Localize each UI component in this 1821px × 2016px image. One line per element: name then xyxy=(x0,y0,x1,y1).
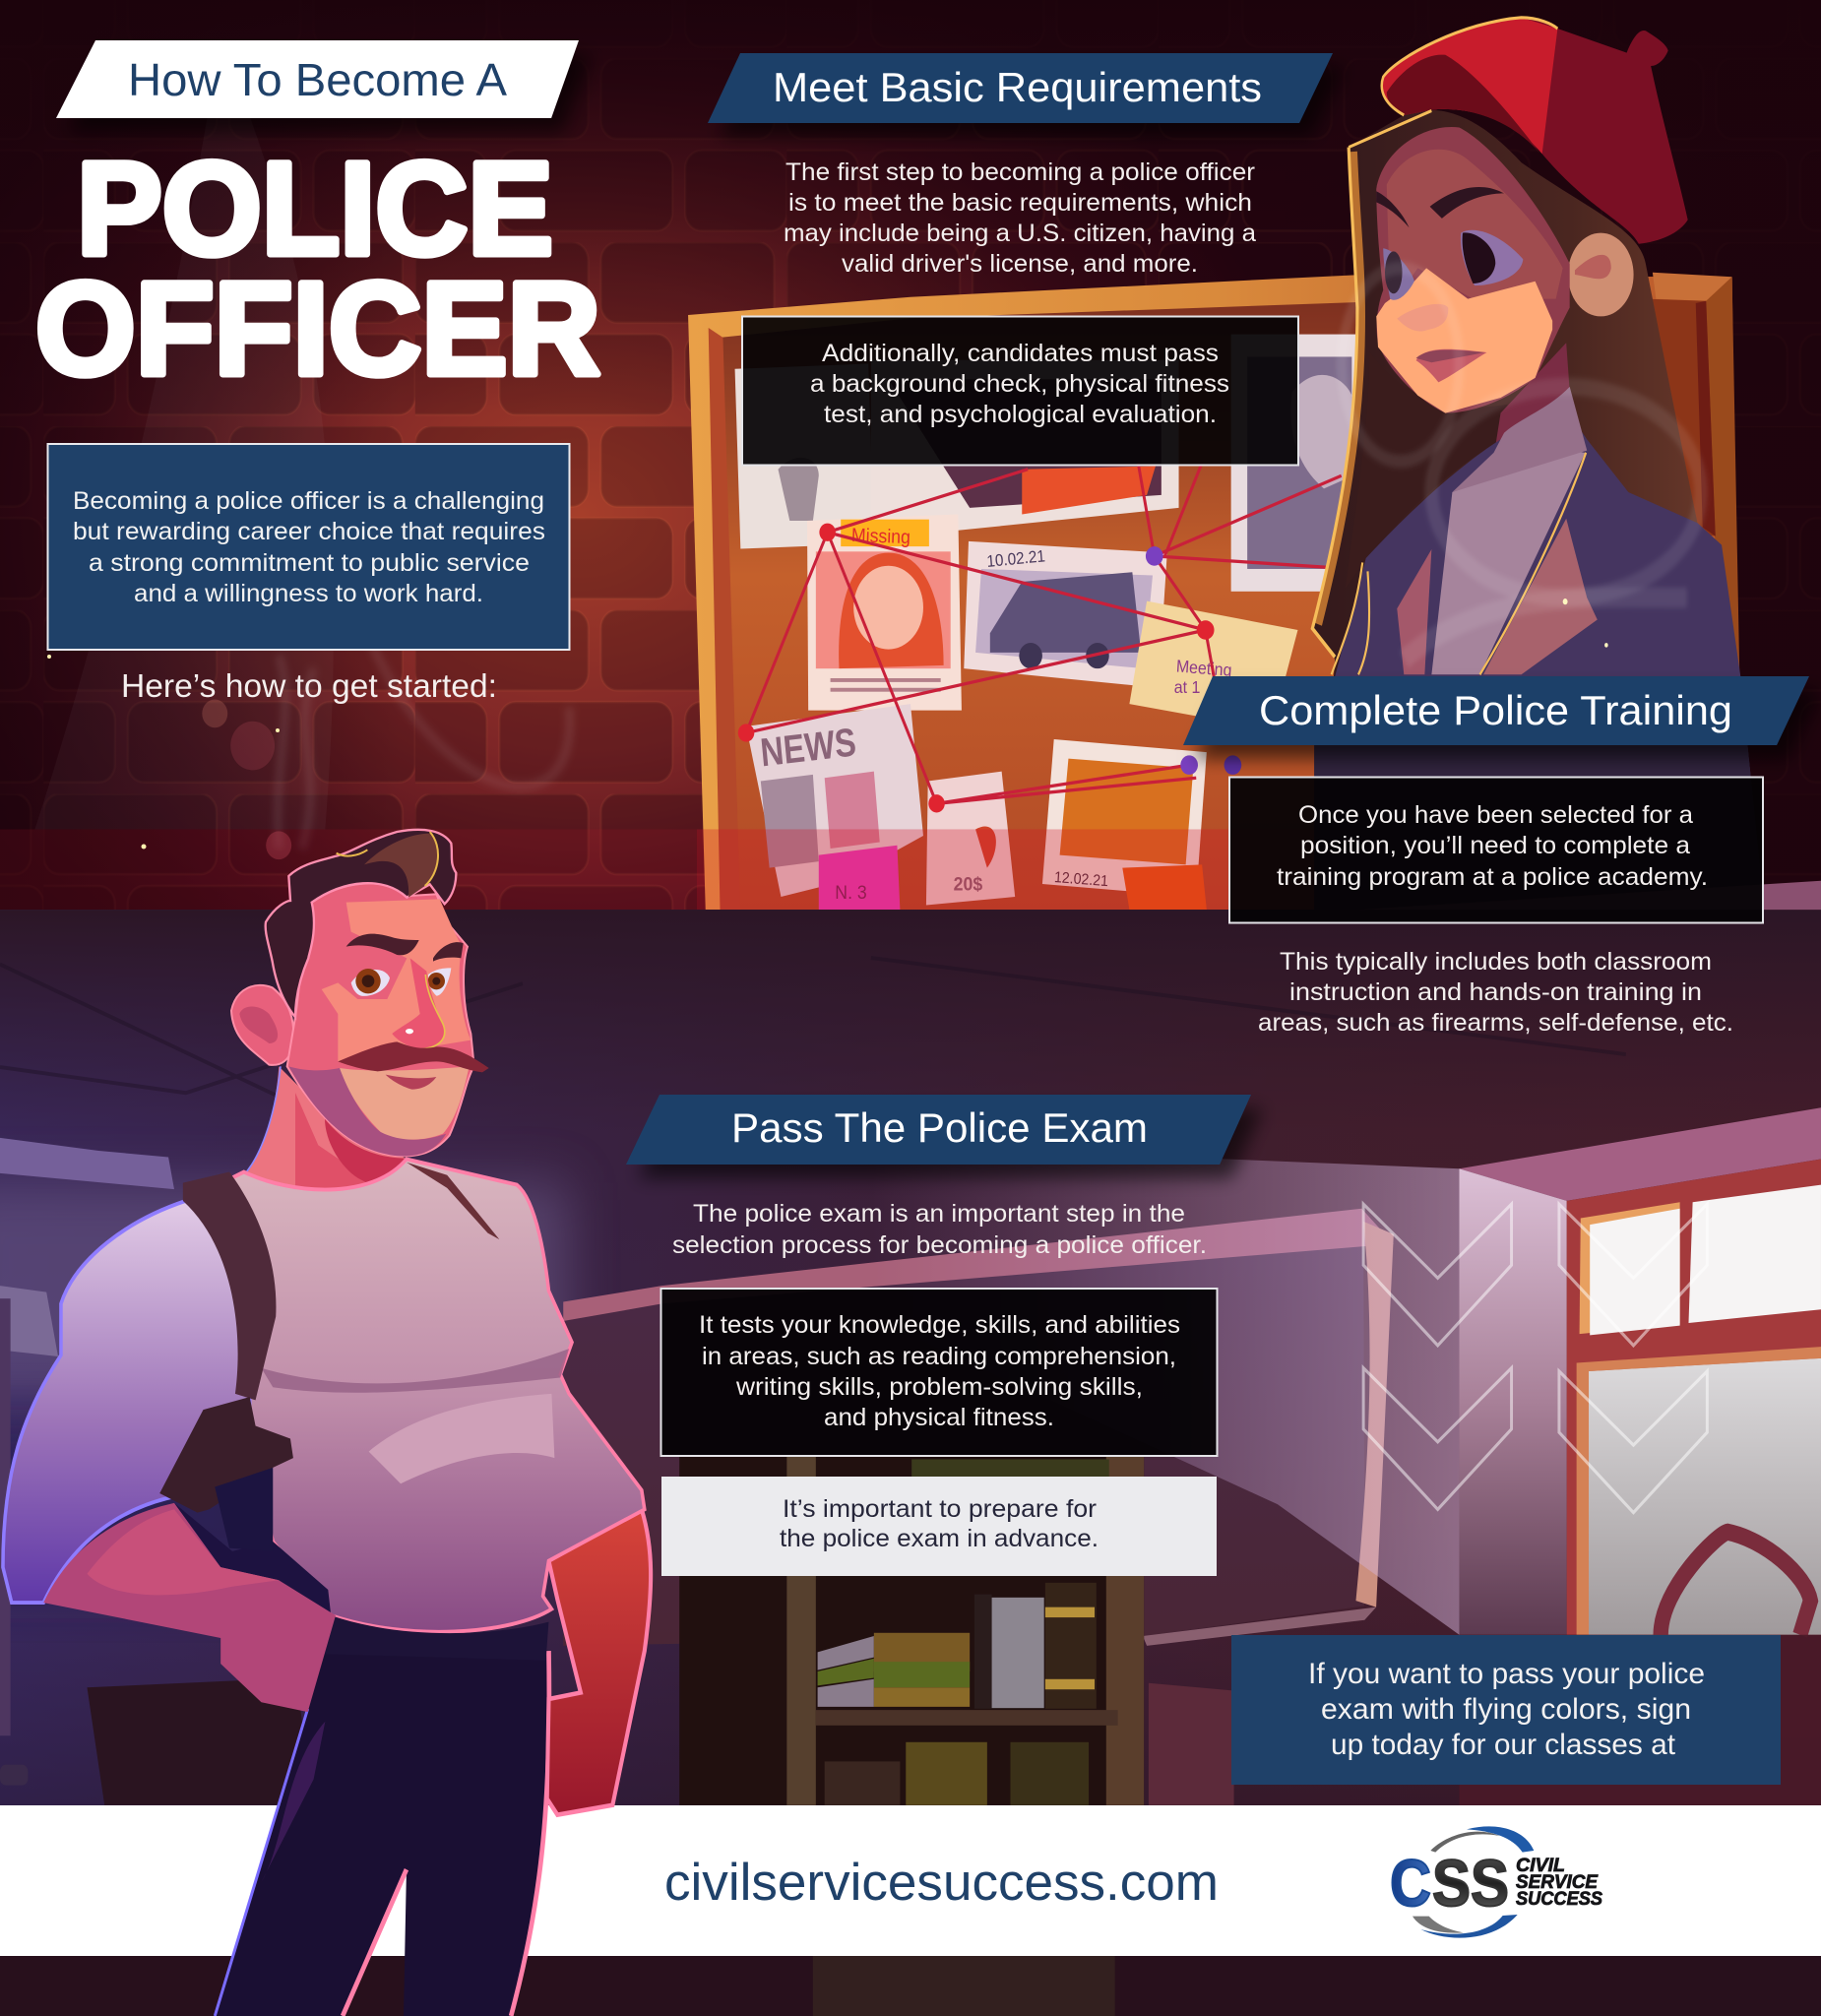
black callout: It tests your knowledge, skills, and abilities xyxy=(699,1311,1180,1339)
eyebrows xyxy=(346,934,464,962)
room walls xyxy=(0,881,1821,2016)
neck xyxy=(243,1066,410,1204)
chevron arrows xyxy=(1363,1204,1707,1513)
van photo: 10.02.21 xyxy=(986,547,1046,571)
black callout: position, you’ll need to complete a xyxy=(1300,832,1690,859)
heading banner xyxy=(1183,676,1809,745)
shadow under arm xyxy=(174,1503,331,1615)
shirt and chest xyxy=(1397,387,1598,674)
board frame behind woman xyxy=(1646,273,1739,677)
logo: civil service success xyxy=(1390,1826,1602,1938)
paragraph xyxy=(672,1200,1207,1259)
nose xyxy=(392,958,445,1049)
black callout: Once you have been selected for a xyxy=(1298,801,1693,829)
footer white band xyxy=(0,1805,1821,1956)
logo letters: CIVIL xyxy=(1516,1856,1565,1876)
dark floor strip xyxy=(0,1954,1821,2016)
panel: intro: but rewarding career choice that requires xyxy=(73,518,545,545)
missing person poster: Missing xyxy=(851,524,910,547)
title: police officer xyxy=(35,136,600,403)
paragraph: instruction and hands-on training in xyxy=(1289,978,1702,1006)
heading banner xyxy=(626,1095,1251,1165)
window xyxy=(1459,1107,1821,1805)
mouth xyxy=(386,1075,436,1090)
logo letters: SS xyxy=(1432,1847,1509,1921)
paragraph: This typically includes both classroom xyxy=(1280,948,1712,976)
face xyxy=(1376,127,1570,413)
heading banner: Complete Police Training xyxy=(1259,687,1732,733)
nose xyxy=(1397,304,1448,332)
banner: how to become a: How To Become A xyxy=(128,54,507,105)
logo letters: C xyxy=(1390,1847,1431,1921)
panel: intro: Becoming a police officer is a challenging xyxy=(73,487,544,515)
black callout: Additionally, candidates must pass xyxy=(822,340,1219,367)
sparkles xyxy=(47,655,280,849)
panel: intro xyxy=(47,444,569,650)
hair xyxy=(266,830,456,1017)
logo letters: SUCCESS xyxy=(1516,1889,1602,1910)
right portrait photo xyxy=(1231,335,1364,592)
shoulder strap xyxy=(183,1172,276,1400)
belt xyxy=(325,1615,548,1661)
eyes xyxy=(1383,230,1523,300)
text: get started: Here’s how to get started: xyxy=(121,667,497,704)
black callout xyxy=(1229,778,1763,923)
left wall shelves xyxy=(0,1138,569,1735)
black callout xyxy=(742,317,1298,465)
red haired photo xyxy=(871,360,1179,531)
policeman body xyxy=(3,1159,651,2016)
logo swooshes xyxy=(1413,1826,1534,1938)
paragraph: is to meet the basic requirements, which xyxy=(788,189,1252,217)
news clipping: NEWS xyxy=(759,721,858,776)
jacket xyxy=(1314,409,1770,967)
smoke wisps xyxy=(1342,268,1701,660)
t-shirt torso xyxy=(186,1159,645,1632)
section: meet basic requirements xyxy=(708,53,1333,465)
gold jacket piping xyxy=(1332,453,1586,674)
brick wall xyxy=(0,0,1821,910)
paragraph: areas, such as firearms, self-defense, etc. xyxy=(1258,1009,1733,1037)
heading banner: Pass The Police Exam xyxy=(731,1104,1148,1151)
section: pass the police exam xyxy=(626,1095,1251,1576)
wall panel left of window xyxy=(563,1209,1394,1646)
beret xyxy=(1349,18,1688,244)
orange evidence photo xyxy=(1042,739,1207,897)
envelope: 20$ xyxy=(954,873,983,895)
right side table xyxy=(1149,1683,1234,1805)
dark lower hair xyxy=(1346,351,1508,589)
panel: call to action: If you want to pass your police xyxy=(1308,1658,1705,1690)
black callout: in areas, such as reading comprehension, xyxy=(702,1343,1176,1370)
white callout: It’s important to prepare for xyxy=(783,1495,1097,1523)
meeting note: at 1 xyxy=(1174,677,1200,697)
shoe print note xyxy=(735,364,874,549)
section: complete police training xyxy=(1183,676,1809,1037)
central bookshelf xyxy=(679,1456,1144,1805)
hair xyxy=(1312,110,1742,967)
black callout: and physical fitness. xyxy=(824,1404,1054,1431)
black callout: a background check, physical fitness xyxy=(810,370,1229,398)
holster and gun xyxy=(159,1397,293,1551)
paragraph xyxy=(1258,948,1733,1037)
panel: intro: a strong commitment to public service xyxy=(89,549,530,577)
lower face mask xyxy=(1376,268,1552,413)
pink and orange sticky notes: N. 3 xyxy=(835,881,867,903)
eyes xyxy=(351,968,451,996)
panel: intro: and a willingness to work hard. xyxy=(134,580,483,607)
sparkles xyxy=(1563,598,1608,648)
panel: call to action: up today for our classes at xyxy=(1331,1729,1676,1761)
heading banner xyxy=(708,53,1333,123)
chin xyxy=(340,1066,470,1140)
envelope xyxy=(926,772,1015,906)
paragraph xyxy=(784,158,1256,278)
black callout: test, and psychological evaluation. xyxy=(824,401,1217,428)
woman detective xyxy=(1312,18,1770,967)
policeman head and neck xyxy=(231,830,489,1204)
trousers xyxy=(215,1615,549,2016)
black callout: training program at a police academy. xyxy=(1277,863,1708,891)
eyebrows xyxy=(1376,187,1504,227)
left forearm and fist xyxy=(43,1503,336,1712)
pink and orange sticky notes xyxy=(819,846,1207,910)
meeting note xyxy=(1129,601,1297,729)
white callout xyxy=(661,1477,1217,1576)
left sleeve xyxy=(3,1201,250,1603)
logo letters xyxy=(1390,1847,1602,1921)
left desk xyxy=(0,1677,314,1805)
title: police officer: OFFICER xyxy=(35,256,600,403)
paragraph: may include being a U.S. citizen, having a xyxy=(784,220,1256,247)
black callout xyxy=(661,1289,1217,1456)
right arm xyxy=(547,1509,651,1815)
white callout: the police exam in advance. xyxy=(780,1525,1099,1552)
paragraph: The police exam is an important step in the xyxy=(693,1200,1185,1228)
heading banner: Meet Basic Requirements xyxy=(773,64,1262,110)
logo letters: SERVICE xyxy=(1516,1872,1599,1893)
panel: call to action: exam with flying colors, sign xyxy=(1321,1693,1691,1726)
light beam xyxy=(871,1144,1459,1635)
scene upper wall and corkboard xyxy=(0,0,1821,910)
lit forehead and cheek xyxy=(322,899,471,1061)
paragraph: selection process for becoming a police officer. xyxy=(672,1231,1207,1259)
neck xyxy=(1494,343,1573,457)
jaw shadow xyxy=(288,1066,446,1156)
missing person poster xyxy=(807,514,962,711)
title: police officer: POLICE xyxy=(77,136,553,283)
red strings and pins xyxy=(738,463,1353,812)
paragraph: valid driver's license, and more. xyxy=(842,250,1198,278)
website url: civilservicesuccess.com xyxy=(664,1854,1219,1912)
banner: how to become a xyxy=(56,40,579,118)
news clipping xyxy=(746,704,923,897)
meeting note: Meeting xyxy=(1175,657,1232,680)
van photo xyxy=(964,541,1167,688)
ear xyxy=(1568,233,1634,316)
evidence corkboard xyxy=(0,276,1739,910)
scene lower room xyxy=(0,881,1821,2016)
orange evidence photo: 12.02.21 xyxy=(1053,868,1109,890)
moustache xyxy=(338,1041,489,1072)
panel: call to action xyxy=(1231,1635,1781,1785)
ear xyxy=(231,985,294,1065)
paragraph: The first step to becoming a police officer xyxy=(785,158,1255,186)
lips xyxy=(1416,349,1486,382)
black callout: writing skills, problem-solving skills, xyxy=(735,1373,1143,1401)
face xyxy=(287,883,474,1156)
